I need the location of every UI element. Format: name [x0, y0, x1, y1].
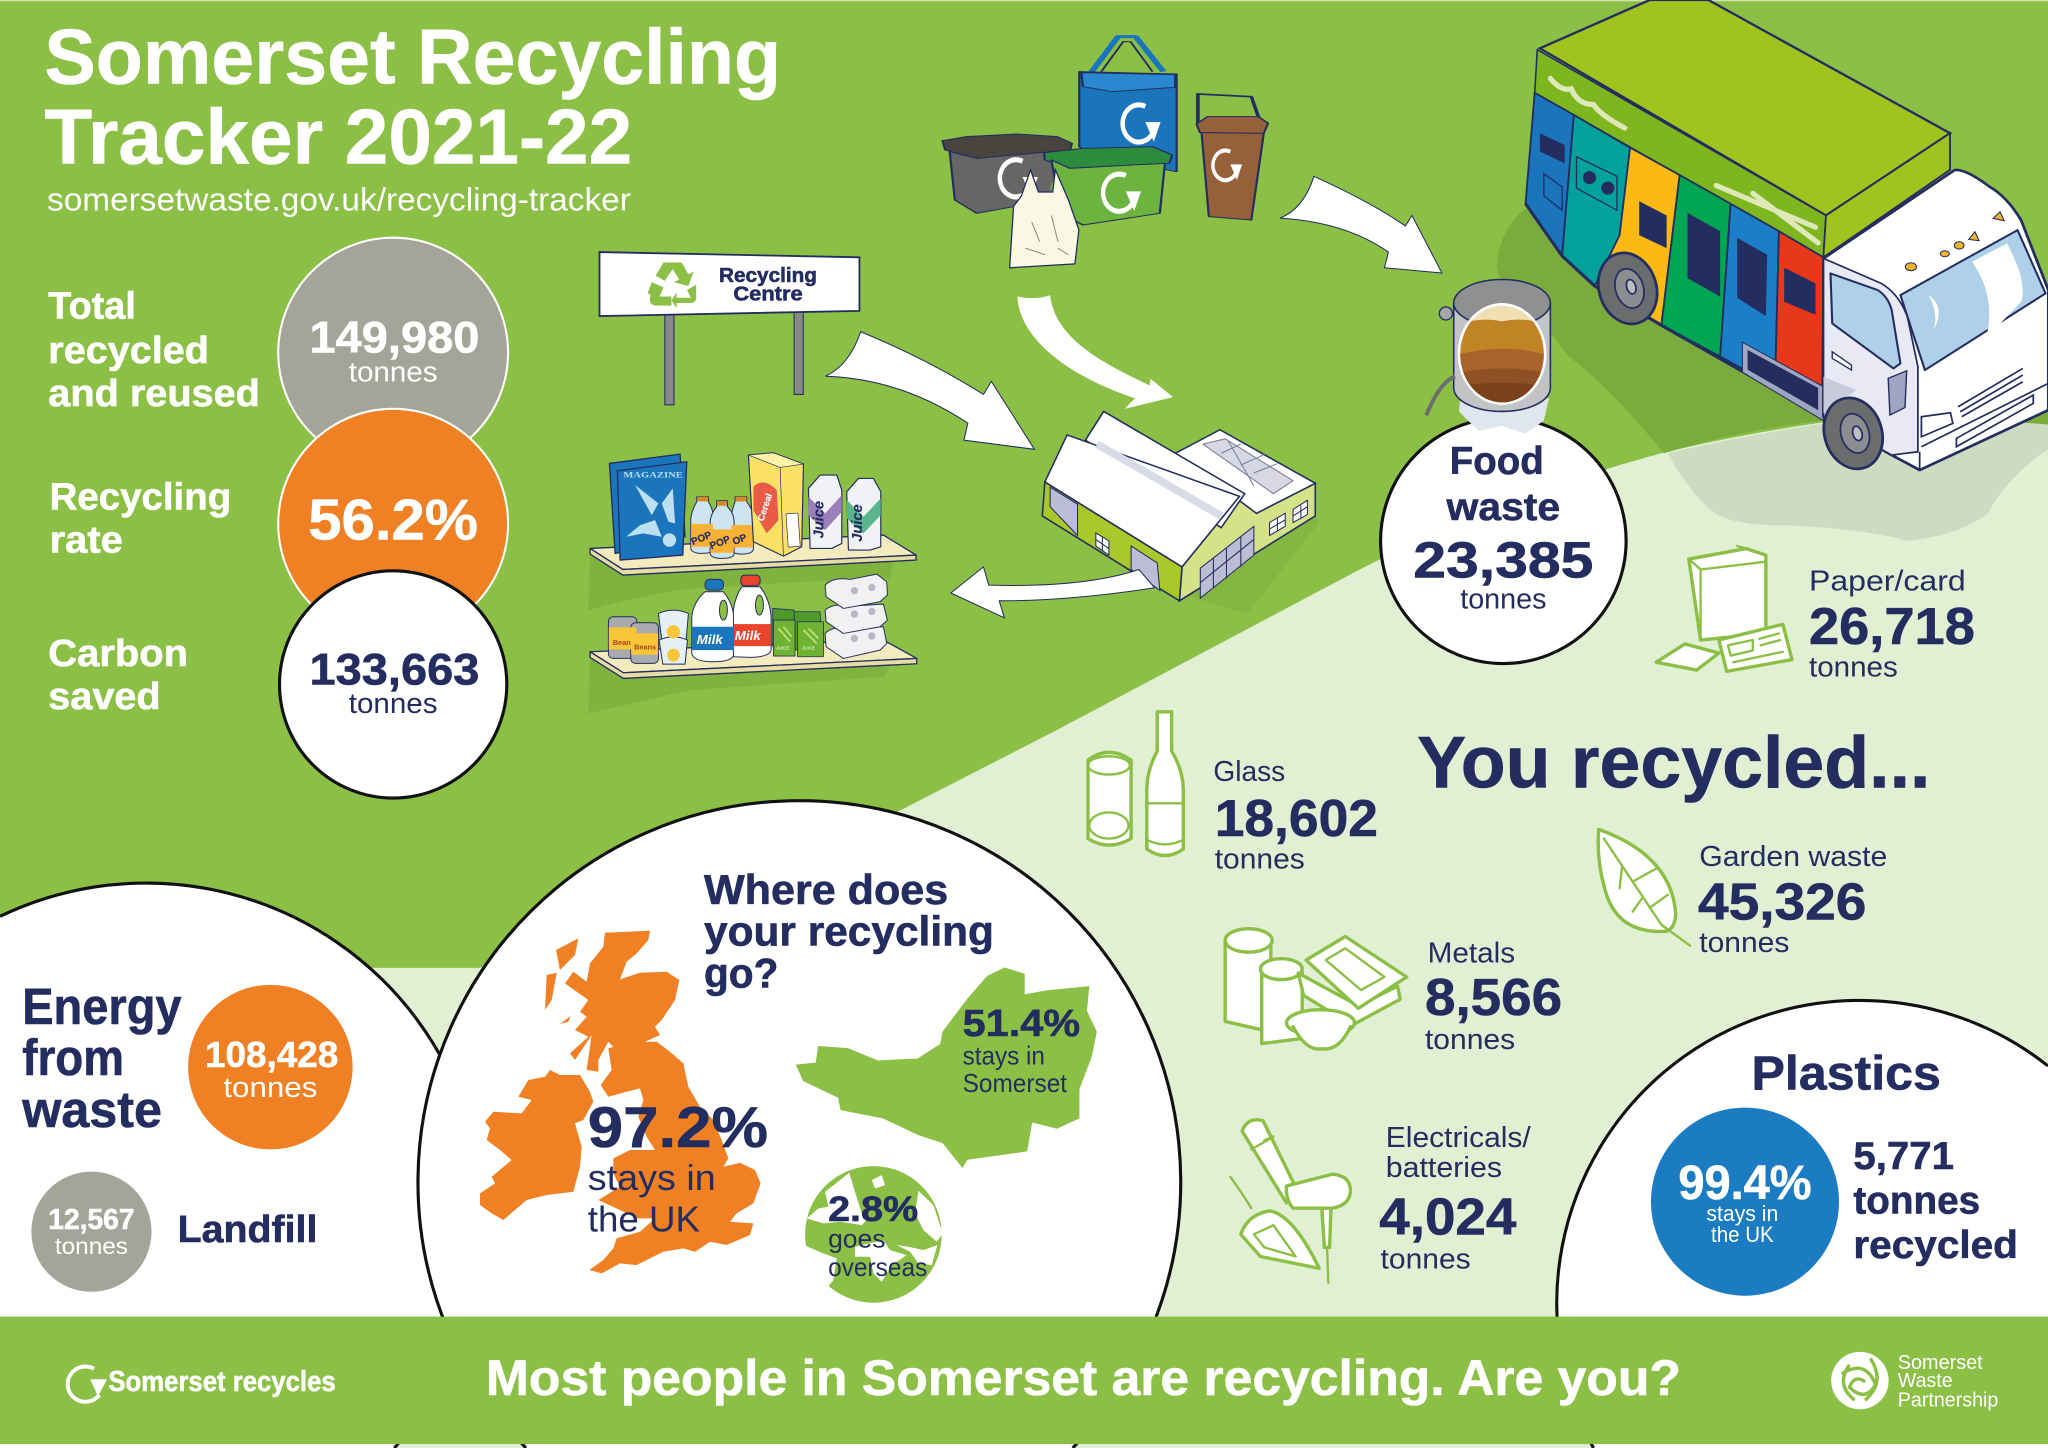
illustration: shelves of recyclable goods: POP	[690, 530, 714, 548]
panel: energy from waste: from	[22, 1029, 124, 1086]
illustration: shelves of recyclable goods: OP	[731, 532, 749, 548]
food waste circle: Food	[1450, 440, 1544, 483]
UK statistic	[588, 1096, 768, 1240]
illustration: shelves of recyclable goods: MAGAZINE	[623, 470, 683, 479]
item: garden waste	[1598, 829, 1887, 959]
illustration: recycling plant	[1038, 411, 1319, 614]
title: Tracker 2021-22	[44, 92, 632, 180]
icon: jar and bottle	[1088, 712, 1183, 856]
item: garden waste: Garden waste	[1699, 841, 1887, 873]
UK statistic: 97.2%	[588, 1096, 768, 1160]
item: garden waste: tonnes	[1699, 927, 1789, 959]
top edge highlight	[0, 0, 2048, 1]
item: paper and card	[1656, 546, 1975, 684]
logo: Somerset Waste Partnership: Waste	[1898, 1370, 1953, 1392]
stat labels: Carbon	[48, 633, 188, 675]
truck cab and wheels	[1590, 170, 2048, 475]
panel: energy from waste: waste	[21, 1081, 162, 1138]
stat circle: total recycled	[278, 238, 508, 468]
icon: globe	[804, 1166, 943, 1303]
item: electricals and batteries: 4,024	[1379, 1188, 1516, 1246]
panel: plastics: Plastics	[1752, 1046, 1941, 1100]
logo: Somerset recycles	[68, 1366, 336, 1402]
Somerset statistic: 51.4%	[963, 1003, 1080, 1045]
food waste circle: 23,385	[1413, 531, 1593, 588]
heading: Where does	[704, 866, 948, 913]
stat circle: carbon saved: 133,663	[310, 645, 479, 694]
recycling centre sign: Recycling	[719, 265, 817, 287]
recycling centre sign	[600, 252, 859, 405]
item: garden waste: 45,326	[1698, 874, 1866, 932]
item: metals: tonnes	[1425, 1024, 1515, 1056]
footer tagline: Most people in Somerset are recycling. Are you?	[486, 1350, 1681, 1406]
illustration: shelves of recyclable goods: Beans	[634, 642, 656, 651]
plastics figure: 99.4%	[1678, 1156, 1812, 1210]
arrow: bins to food digester	[1280, 176, 1442, 273]
overseas statistic: 2.8%	[828, 1190, 918, 1229]
heading	[704, 866, 994, 996]
illustration: shelves of recyclable goods: POP	[708, 534, 732, 552]
panel: energy from waste: Landfill	[178, 1209, 317, 1251]
energy from waste figure: 108,428	[205, 1034, 338, 1075]
stat circle: total recycled: 149,980	[310, 314, 479, 363]
overseas statistic	[828, 1190, 927, 1282]
map: UK and Ireland	[480, 931, 761, 1273]
title: Somerset Recycling	[44, 13, 781, 101]
Somerset statistic	[963, 1003, 1080, 1098]
landfill figure: 12,567	[48, 1204, 135, 1236]
panel: energy from waste	[0, 883, 483, 1448]
arrow: plant to products shelf	[951, 567, 1155, 618]
footer band	[0, 1317, 2048, 1444]
item: paper and card: Paper/card	[1809, 565, 1966, 597]
plastics figure: stays in	[1706, 1201, 1778, 1226]
stat labels: and reused	[48, 373, 260, 415]
item: paper and card: 26,718	[1809, 598, 1975, 656]
icon: cans and trays	[1225, 929, 1407, 1049]
item: glass	[1088, 712, 1378, 876]
background: light green field	[0, 398, 2048, 1448]
stat circle: recycling rate	[278, 409, 508, 639]
illustration: shelves of recyclable goods: Milk	[735, 628, 761, 643]
stat circle: carbon saved	[280, 571, 507, 798]
illustration: shelves of recyclable goods: Bean	[613, 638, 631, 647]
illustration: shelves of recyclable goods: Milk	[697, 632, 723, 647]
food waste circle	[1381, 418, 1626, 664]
item: glass: 18,602	[1215, 790, 1378, 848]
illustration: shelves of recyclable goods: JUICE	[802, 645, 815, 650]
arrow: recycling centre to plant	[825, 332, 1034, 449]
you recycled heading: You recycled...	[1417, 723, 1930, 804]
food waste circle: tonnes	[1460, 584, 1546, 616]
item: metals: Metals	[1428, 938, 1515, 970]
item: electricals and batteries: tonnes	[1381, 1243, 1471, 1275]
logo: Somerset Waste Partnership	[1831, 1352, 1998, 1412]
panel: plastics: tonnes	[1853, 1179, 1980, 1222]
plastics figure	[1651, 1108, 1839, 1296]
heading: go?	[704, 949, 778, 996]
item: electricals and batteries	[1230, 1120, 1531, 1283]
landfill figure: tonnes	[55, 1233, 128, 1259]
item: paper and card: tonnes	[1809, 652, 1898, 684]
truck shadow	[1497, 209, 2048, 541]
arrow: bags to recycling plant	[1017, 295, 1173, 409]
stat labels	[48, 286, 260, 718]
Somerset statistic: stays in	[963, 1041, 1045, 1071]
UK statistic: stays in	[588, 1157, 716, 1198]
panel: plastics: recycled	[1853, 1224, 2018, 1267]
overseas statistic: overseas	[828, 1252, 927, 1282]
item: glass: Glass	[1213, 756, 1285, 788]
food waste circle: waste	[1445, 486, 1560, 529]
icon: battery, hairdryer and iron	[1230, 1120, 1351, 1283]
item: electricals and batteries: Electricals/	[1386, 1122, 1531, 1154]
overseas statistic: goes	[828, 1223, 886, 1253]
illustration: recycling bins and bags	[942, 37, 1268, 268]
panel: plastics	[1557, 1000, 2048, 1448]
stat circle: total recycled: tonnes	[349, 356, 438, 388]
plastics figure: the UK	[1711, 1222, 1774, 1247]
item: glass: tonnes	[1215, 844, 1305, 876]
item: metals: 8,566	[1425, 969, 1562, 1027]
stat circle: carbon saved: tonnes	[349, 688, 438, 720]
panel: plastics: 5,771	[1853, 1135, 1954, 1178]
illustration: recycling truck	[1526, 0, 1950, 421]
icon: leaf	[1598, 829, 1690, 946]
illustration: shelves of recyclable goods: Cereal	[756, 492, 774, 522]
item: metals	[1225, 929, 1562, 1056]
energy from waste figure: tonnes	[223, 1072, 317, 1104]
heading: your recycling	[704, 908, 994, 955]
stat labels: recycled	[48, 330, 209, 372]
illustration: shelves of recyclable goods	[588, 453, 917, 713]
panel: where does your recycling go	[418, 801, 1181, 1448]
landfill figure	[31, 1172, 152, 1292]
illustration: shelves of recyclable goods: Juice	[850, 504, 866, 542]
illustration: food waste digester	[1426, 280, 1554, 434]
stat labels: Total	[48, 286, 136, 328]
logo: Somerset Waste Partnership: Partnership	[1898, 1390, 1998, 1412]
illustration: shelves of recyclable goods: JUICE	[776, 645, 790, 650]
logo: Somerset recycles: Somerset recycles	[108, 1366, 336, 1398]
website address: somersetwaste.gov.uk/recycling-tracker	[47, 180, 631, 217]
icon: paper and card	[1656, 546, 1792, 671]
item: electricals and batteries: batteries	[1386, 1152, 1502, 1184]
Somerset statistic: Somerset	[963, 1068, 1068, 1098]
recycling centre sign: Centre	[733, 283, 803, 305]
stat circle: recycling rate: 56.2%	[308, 488, 478, 552]
logo: Somerset Waste Partnership: Somerset	[1898, 1352, 1983, 1374]
panel: energy from waste: Energy	[22, 978, 182, 1035]
UK statistic: the UK	[588, 1199, 700, 1240]
title	[44, 13, 781, 180]
stat labels: Recycling	[50, 476, 231, 518]
energy from waste figure	[188, 985, 353, 1149]
stat labels: rate	[50, 520, 123, 562]
map: Somerset	[796, 968, 1097, 1168]
stat labels: saved	[48, 676, 161, 718]
illustration: shelves of recyclable goods: Juice	[811, 501, 827, 538]
